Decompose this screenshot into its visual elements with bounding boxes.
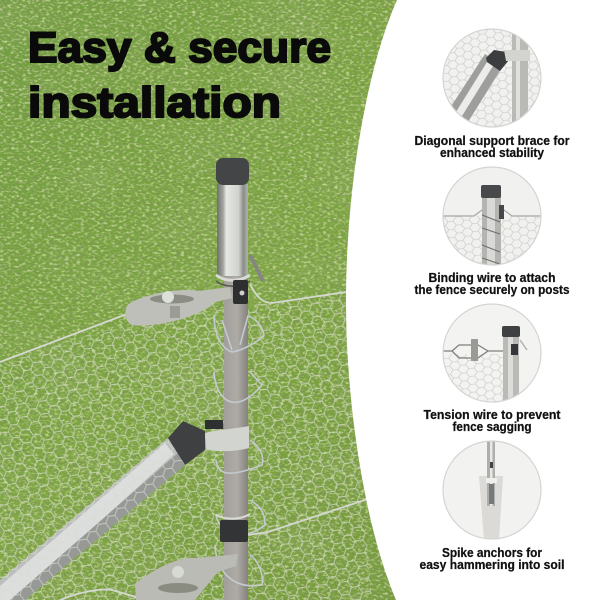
- icon: tension wire circle: [444, 304, 540, 402]
- lower tensioner: [135, 554, 238, 600]
- top tension wires: [0, 284, 368, 600]
- caption: spike anchor: Spike anchors for: [442, 546, 542, 560]
- icon: binding wire circle: [444, 168, 540, 264]
- title: [28, 24, 331, 127]
- icon: spike anchor circle: [444, 442, 540, 538]
- caption: binding wire: Binding wire to attach: [428, 271, 556, 285]
- caption: diagonal brace: [414, 134, 570, 160]
- caption: tension wire: Tension wire to prevent: [424, 408, 561, 422]
- panel: tension wire detail: [424, 302, 561, 434]
- lower clip: [216, 514, 250, 542]
- icon: brace circle: [444, 30, 540, 126]
- title: installation: [28, 79, 281, 127]
- caption: tension wire: fence sagging: [452, 420, 532, 434]
- upper tensioner: [125, 287, 232, 326]
- panel: spike anchor detail: [420, 439, 564, 572]
- title: Easy & secure: [28, 24, 331, 72]
- caption: binding wire: [414, 271, 570, 297]
- wire bindings on post: [214, 315, 265, 586]
- caption: diagonal brace: Diagonal support brace for: [414, 134, 570, 148]
- diagonal support brace: [0, 421, 205, 600]
- panel: diagonal brace detail: [414, 25, 570, 160]
- caption: spike anchor: easy hammering into soil: [420, 558, 564, 572]
- upper clip and ring: [216, 255, 263, 304]
- caption: diagonal brace: enhanced stability: [440, 146, 544, 160]
- caption: binding wire: the fence securely on posts: [414, 283, 570, 297]
- chicken wire mesh fence: [0, 293, 372, 600]
- white curved panel: [346, 0, 600, 600]
- caption: tension wire: [424, 408, 561, 434]
- caption: spike anchor: [420, 546, 564, 572]
- panel: binding wire detail: [414, 165, 570, 297]
- brace post clamp: [205, 420, 249, 451]
- fence post: [216, 158, 249, 600]
